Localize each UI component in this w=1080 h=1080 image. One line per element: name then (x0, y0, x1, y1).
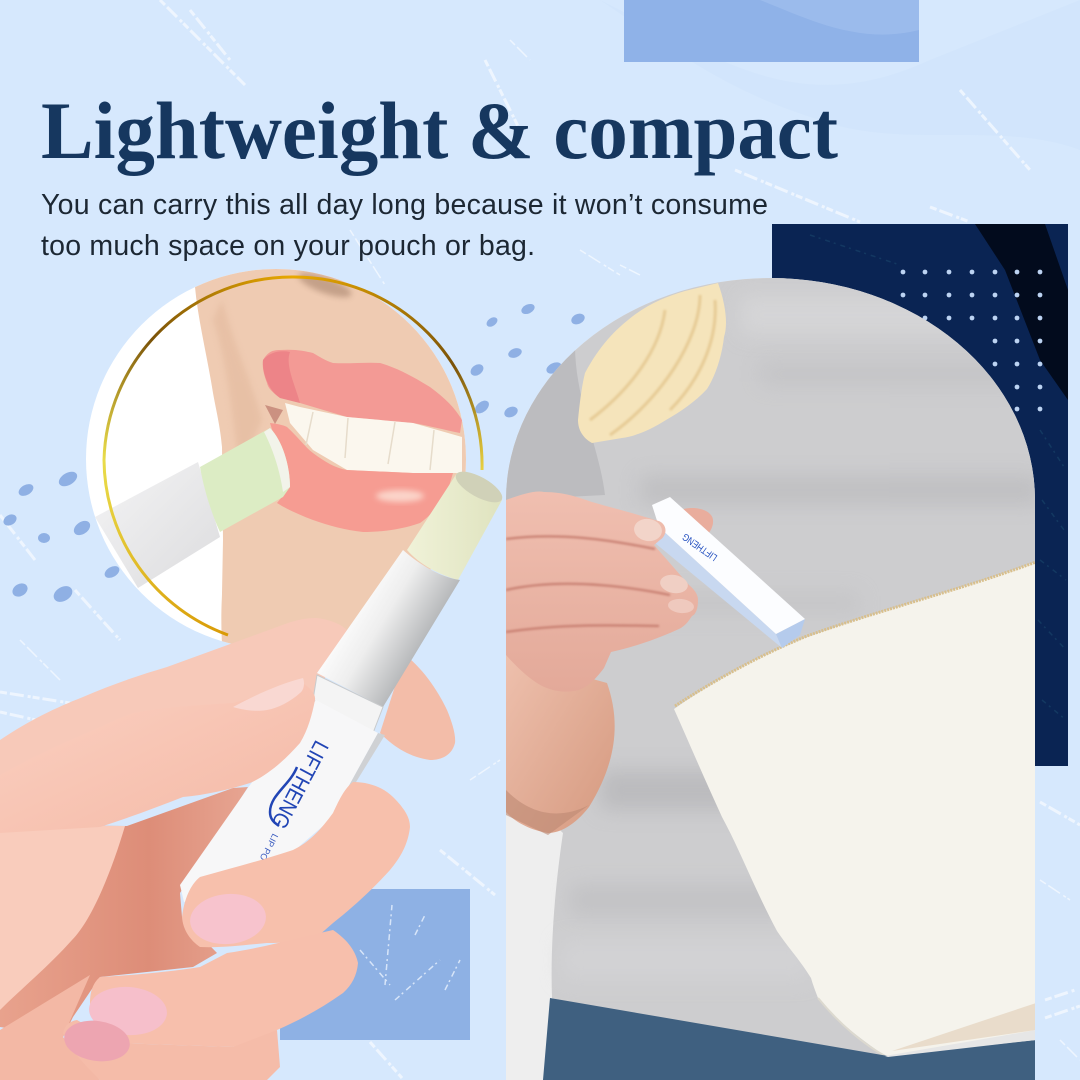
brand on tube: LIFTHENG (267, 737, 334, 833)
description: You can carry this all day long because it won’t consume (41, 189, 768, 221)
title: Lightweight & compact (41, 85, 838, 176)
description (41, 189, 768, 262)
photo: arch with woman and pouch (506, 270, 1040, 1080)
balm tube top (317, 550, 460, 707)
gold ring (104, 277, 482, 635)
small balm tube: LIFTHENG (681, 530, 720, 563)
decorative blue block: bottom (280, 889, 470, 1040)
decorative blue block: top (624, 0, 919, 62)
balm tube body (180, 700, 385, 902)
balm stick (407, 466, 507, 580)
description: too much space on your pouch or bag. (41, 230, 535, 262)
decorative navy block with dots (772, 224, 1068, 766)
back index finger (0, 618, 347, 800)
palm interior (0, 787, 248, 1037)
pouch (674, 562, 1036, 1056)
pouch zipper (675, 562, 1036, 706)
shirt (506, 270, 1036, 1056)
photo: lips in circle (86, 260, 482, 660)
decorative dots: centre (468, 302, 586, 419)
lower lip (270, 423, 453, 532)
hand holding tube (506, 492, 698, 692)
hair (578, 283, 726, 443)
palm light (0, 825, 125, 1010)
photo: hand holding lip balm (0, 466, 507, 1080)
balm tube body: LIP PO (258, 832, 280, 862)
thumb behind tube (684, 508, 713, 532)
upper lip (263, 350, 462, 433)
thumb (0, 678, 315, 833)
forearm (506, 655, 615, 833)
little finger (62, 1017, 280, 1080)
small balm tube (652, 497, 805, 648)
decorative dots: left (1, 469, 121, 605)
ring finger (87, 930, 358, 1047)
jeans (543, 998, 1036, 1080)
right finger behind tube (380, 655, 455, 760)
middle finger (182, 782, 410, 947)
skin (195, 269, 466, 644)
balm collar (313, 675, 383, 733)
balm applied to lips (95, 428, 290, 588)
teeth (285, 403, 462, 473)
